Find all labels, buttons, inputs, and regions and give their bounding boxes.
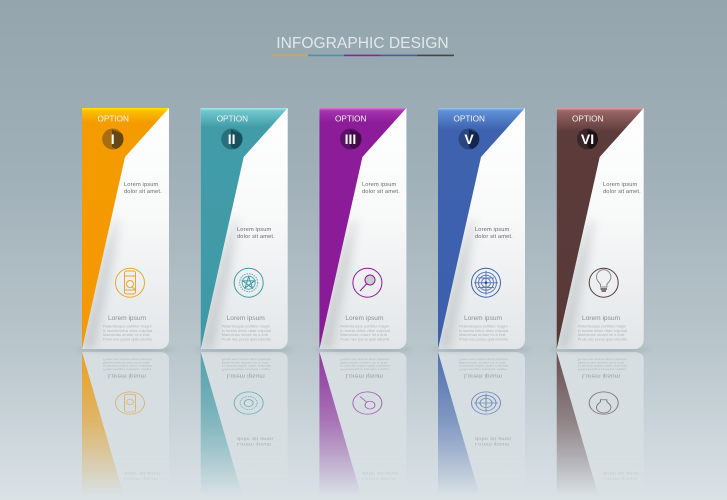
numeral badge — [458, 128, 480, 150]
icon: wheel — [234, 268, 263, 297]
text: note: dolor sit amet. — [237, 234, 275, 240]
text: description: Proin nec purus quis lobortis — [222, 336, 271, 341]
text: description: Pellentesque porttitor magni — [459, 324, 508, 328]
panel: option V reflection: in lacinia tellus vitae vulputat — [459, 364, 508, 368]
coloured band — [82, 108, 169, 349]
panel: option II reflection: Lorem ipsum — [227, 373, 265, 378]
text: description: Lorem ipsum — [227, 315, 265, 322]
panel: option II reflection: Pellentesque porttitor magni — [222, 368, 270, 371]
coloured band — [319, 108, 406, 349]
panel: option VI reflection: Pellentesque porttitor magni — [578, 368, 626, 371]
numeral badge: VI — [581, 131, 594, 147]
text: description: in lacinia tellus vitae vulputat — [459, 328, 509, 333]
panel: option I reflection: dolor sit amet. — [124, 470, 162, 476]
text: note: Lorem ipsum — [237, 227, 272, 233]
text: description: Maecenas ornare mi a erat — [340, 332, 388, 337]
text: note: dolor sit amet. — [475, 234, 513, 240]
numeral badge: III — [345, 131, 356, 147]
text: note: dolor sit amet. — [124, 189, 162, 195]
text: note: dolor sit amet. — [603, 189, 641, 195]
panel: option III reflection — [319, 352, 406, 498]
numeral badge — [340, 128, 362, 150]
text: note — [362, 182, 400, 195]
panel: option VI reflection: Maecenas ornare mi a erat — [578, 361, 624, 365]
option label: OPTION — [335, 114, 366, 124]
text: description — [222, 315, 272, 341]
panel: option V reflection — [438, 352, 525, 498]
text: description: in lacinia tellus vitae vulputat — [578, 328, 628, 333]
panel: option II — [200, 108, 288, 354]
panel: option I reflection: Proin nec purus quis lobortis — [103, 358, 152, 361]
panel: option VI — [556, 108, 644, 354]
icon: target — [472, 268, 500, 297]
text: description: Maecenas ornare mi a erat — [103, 332, 150, 337]
text: description: in lacinia tellus vitae vulputat — [222, 328, 272, 333]
text: description: in lacinia tellus vitae vulputat — [340, 328, 391, 333]
panel: option III reflection: Proin nec purus quis lobortis — [340, 358, 390, 361]
text: note — [237, 227, 275, 240]
text: description: Maecenas ornare mi a erat — [578, 332, 625, 337]
panel: option I reflection: Pellentesque porttitor magni — [103, 368, 152, 371]
panel: option VI reflection — [557, 352, 644, 498]
panel: option V — [438, 108, 525, 354]
panel: option III reflection: Lorem ipsum — [362, 476, 396, 481]
panel: option III — [319, 108, 407, 354]
panel: option III reflection: dolor sit amet. — [362, 470, 400, 476]
text: note — [603, 182, 641, 195]
numeral badge — [102, 128, 124, 150]
text: description: Lorem ipsum — [108, 315, 147, 322]
panel: option II reflection: Maecenas ornare mi a erat — [222, 361, 268, 365]
panel: option III reflection: in lacinia tellus vitae vulputat — [340, 364, 390, 368]
text: description: Pellentesque porttitor magni — [103, 324, 152, 328]
panel: option V reflection: dolor sit amet. — [475, 436, 513, 441]
panel: option V reflection: Maecenas ornare mi a erat — [459, 361, 505, 365]
numeral badge — [577, 128, 598, 150]
text: note: dolor sit amet. — [362, 189, 400, 195]
text: description — [459, 315, 509, 341]
option label: OPTION — [572, 114, 603, 124]
text: description: Proin nec purus quis lobortis — [578, 336, 627, 341]
panel: option II reflection: dolor sit amet. — [237, 436, 275, 441]
text: note: Lorem ipsum — [475, 227, 510, 233]
option label: OPTION — [454, 114, 485, 124]
coloured band — [557, 108, 644, 349]
text: description: Proin nec purus quis lobortis — [459, 336, 508, 341]
text: note — [124, 182, 162, 195]
text: description: Maecenas ornare mi a erat — [222, 332, 269, 337]
panel: option I reflection: Lorem ipsum — [124, 476, 158, 481]
coloured band — [438, 108, 525, 349]
numeral badge: II — [228, 131, 236, 147]
panel: option I reflection: Maecenas ornare mi a erat — [103, 361, 149, 365]
text: description — [103, 315, 153, 341]
panel: option I reflection: Lorem ipsum — [108, 373, 146, 378]
icon: phone search — [116, 268, 144, 297]
numeral badge: V — [464, 131, 474, 147]
panel: option VI reflection: Proin nec purus quis lobortis — [578, 358, 627, 361]
text: description: Lorem ipsum — [582, 315, 621, 322]
numeral badge: I — [111, 131, 115, 147]
panel: option III reflection: Lorem ipsum — [345, 373, 384, 378]
option label: OPTION — [217, 114, 248, 124]
panel: option II reflection: Proin nec purus quis lobortis — [222, 358, 271, 361]
option label: OPTION — [98, 114, 129, 124]
icon: light bulb — [589, 268, 618, 297]
panel: option III reflection: Maecenas ornare mi a erat — [340, 361, 387, 365]
panel: option I reflection: in lacinia tellus vitae vulputat — [103, 364, 152, 368]
text: description: Pellentesque porttitor magni — [340, 324, 389, 328]
numeral badge — [221, 128, 243, 150]
panel: option V reflection: Pellentesque porttitor magni — [459, 368, 508, 371]
panel: option III reflection: Pellentesque porttitor magni — [340, 368, 389, 371]
panel: option I reflection — [82, 352, 169, 498]
text: note: Lorem ipsum — [124, 182, 159, 188]
panel: option VI reflection: in lacinia tellus vitae vulputat — [578, 364, 627, 368]
panel: option II reflection: in lacinia tellus vitae vulputat — [222, 364, 271, 368]
text: description — [340, 315, 391, 341]
panel: option VI reflection: Lorem ipsum — [582, 373, 620, 378]
panel: option II reflection: Lorem ipsum — [237, 441, 271, 446]
text: description: Proin nec purus quis lobortis — [103, 336, 152, 341]
text: description: Proin nec purus quis lobortis — [340, 336, 390, 341]
panel: option V reflection: Lorem ipsum — [475, 441, 509, 446]
panel: option VI reflection: dolor sit amet. — [603, 470, 641, 476]
text: note — [475, 227, 513, 240]
panel: option V reflection: Proin nec purus quis lobortis — [459, 358, 508, 361]
coloured band — [201, 108, 288, 349]
icon: magnifying glass — [353, 268, 382, 297]
text: note: Lorem ipsum — [362, 182, 397, 188]
text: description: Lorem ipsum — [464, 315, 503, 322]
text: description: Pellentesque porttitor magni — [578, 324, 626, 328]
panel: option V reflection: Lorem ipsum — [464, 373, 502, 378]
title: INFOGRAPHIC DESIGN — [276, 35, 449, 52]
panel: option II reflection — [201, 352, 288, 498]
text: description: in lacinia tellus vitae vulputat — [103, 328, 153, 333]
text: description: Lorem ipsum — [345, 315, 384, 322]
text: note: Lorem ipsum — [603, 182, 638, 188]
text: description: Pellentesque porttitor magni — [222, 324, 270, 328]
text: description — [578, 315, 628, 341]
panel: option I — [82, 108, 169, 354]
text: description: Maecenas ornare mi a erat — [459, 332, 506, 337]
panel: option VI reflection: Lorem ipsum — [603, 476, 637, 481]
